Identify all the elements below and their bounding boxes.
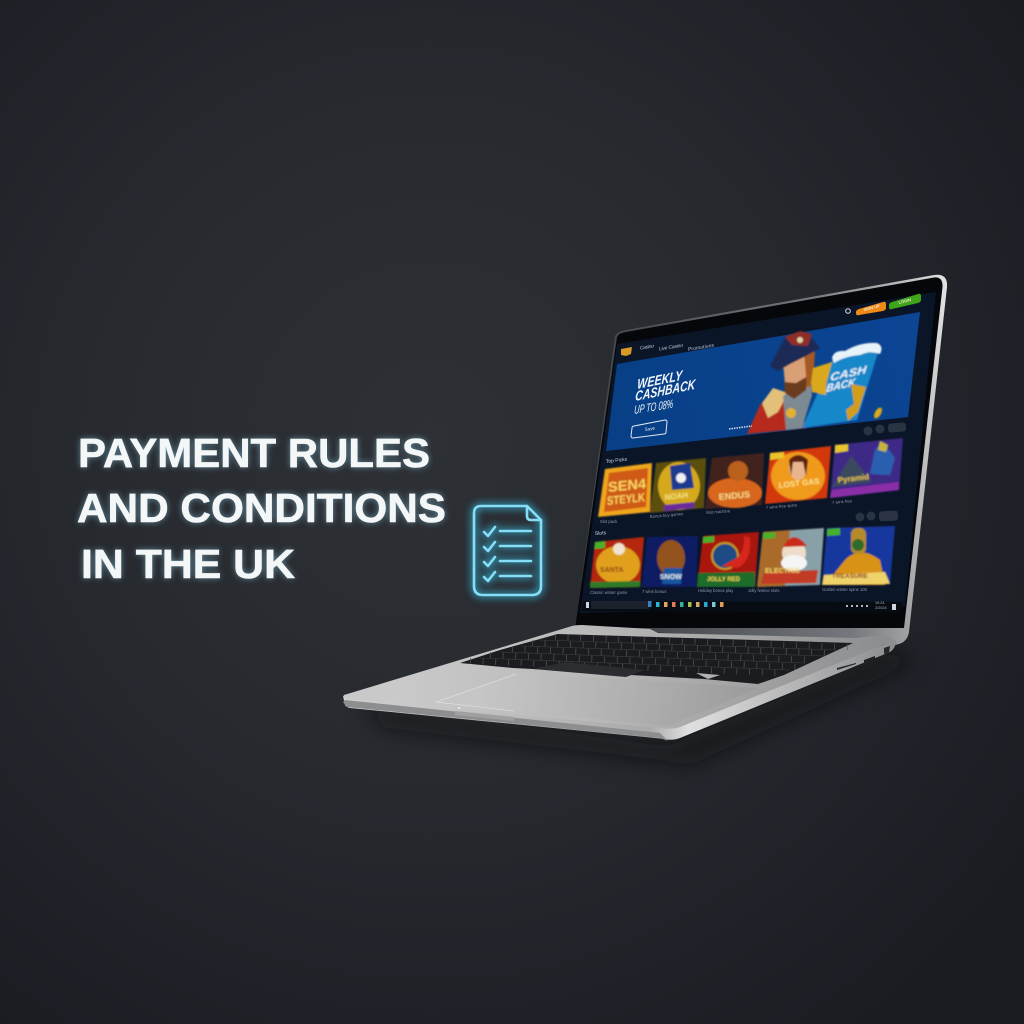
game captions: 7 wins bonus <box>642 589 666 594</box>
taskbar: 10:24 <box>875 601 885 605</box>
banner button: Save <box>644 426 656 432</box>
banner button <box>631 420 667 438</box>
title <box>77 430 446 587</box>
front notch <box>455 711 514 721</box>
game captions: 7 wins free <box>832 498 853 505</box>
nav bar <box>621 294 921 366</box>
banner text: CASHBACK <box>635 376 697 404</box>
card 5: Pyramid <box>837 472 870 485</box>
carousel controls <box>856 422 906 522</box>
nav bar: SIGN UP <box>863 303 881 312</box>
face <box>783 352 811 396</box>
game cards row 2 <box>590 526 895 588</box>
taskbar: 2/2024 <box>875 606 887 610</box>
game cards row 1 <box>598 438 903 517</box>
game captions: Slot machine <box>706 508 731 515</box>
ports <box>837 646 890 670</box>
spacebar <box>533 662 645 677</box>
card 6 <box>590 537 644 588</box>
game captions: Bonus buy games <box>650 511 683 519</box>
card 2: NOAH <box>664 491 689 502</box>
screen <box>580 292 936 613</box>
card 10: TREASURE <box>832 573 868 580</box>
game captions: Golden winter spins 100 <box>822 587 868 592</box>
game captions: Jolly festive slots <box>748 588 779 593</box>
laptop lid <box>575 275 947 645</box>
section labels <box>595 457 628 537</box>
nav bar: Casino <box>640 343 654 352</box>
game captions: Slot pack <box>600 519 618 524</box>
banner <box>606 312 920 451</box>
button: green <box>889 294 921 309</box>
card 8 <box>697 532 759 587</box>
laptop base <box>343 625 896 741</box>
title: AND CONDITIONS <box>77 485 446 531</box>
banner text: WEEKLY <box>637 367 684 392</box>
base deck <box>343 625 895 729</box>
section labels: Slots <box>595 530 607 537</box>
hat <box>770 333 820 371</box>
ribbons <box>811 362 832 395</box>
card 1: STEYLK <box>607 490 645 508</box>
coat <box>747 392 806 434</box>
card 7 <box>642 536 698 587</box>
phone text <box>826 364 868 395</box>
card 3: ENDUS <box>718 489 751 502</box>
section labels: Top Picks <box>606 457 628 465</box>
search icon <box>846 309 850 313</box>
card 2 <box>650 458 706 513</box>
card 6: SANTA <box>600 567 624 574</box>
nav bar: Live Casino <box>659 343 683 353</box>
laptop <box>343 275 947 765</box>
phone text: CASH <box>830 364 868 384</box>
card 1 <box>598 463 652 517</box>
card 5 <box>830 438 903 498</box>
base edge <box>343 640 896 740</box>
game captions <box>590 498 868 595</box>
card 7: SNOW <box>660 574 682 581</box>
nav bar: LOGIN <box>898 297 912 305</box>
banner text: UP TO 08% <box>634 397 674 417</box>
title: IN THE UK <box>81 541 295 587</box>
carousel dots <box>729 426 752 429</box>
title: IN THE UK <box>81 541 295 587</box>
nav bar: Competitions <box>720 342 749 353</box>
nav bar: Promotions <box>688 343 714 353</box>
taskbar <box>582 601 903 613</box>
card 4 <box>765 446 831 504</box>
card 1: SEN4 <box>608 475 646 495</box>
card 10 <box>822 526 895 585</box>
title: PAYMENT RULES <box>78 430 430 476</box>
card 4: LOST GAS <box>778 477 821 490</box>
card 8: JOLLY RED <box>707 577 741 583</box>
laptop shadow <box>360 650 915 765</box>
card 9 <box>757 528 824 587</box>
gold coin <box>786 408 796 418</box>
trackpad <box>436 674 758 726</box>
game captions: Holiday bonus play <box>698 588 734 593</box>
phone text: BACK <box>826 377 857 395</box>
title: AND CONDITIONS <box>77 485 446 531</box>
button: orange <box>856 302 886 315</box>
banner text <box>634 367 697 417</box>
phone <box>802 346 880 428</box>
icon: glowing checklist document <box>474 506 541 595</box>
snow <box>832 343 881 363</box>
keyboard <box>460 634 853 684</box>
title: PAYMENT RULES <box>78 430 430 476</box>
logo <box>621 347 632 356</box>
game captions: Classic winter game <box>590 590 628 595</box>
pirate illustration <box>747 331 884 434</box>
card 9: ELECTRIC <box>765 568 800 575</box>
card 3 <box>705 453 764 509</box>
game captions: 7 wins free spins <box>766 502 797 510</box>
